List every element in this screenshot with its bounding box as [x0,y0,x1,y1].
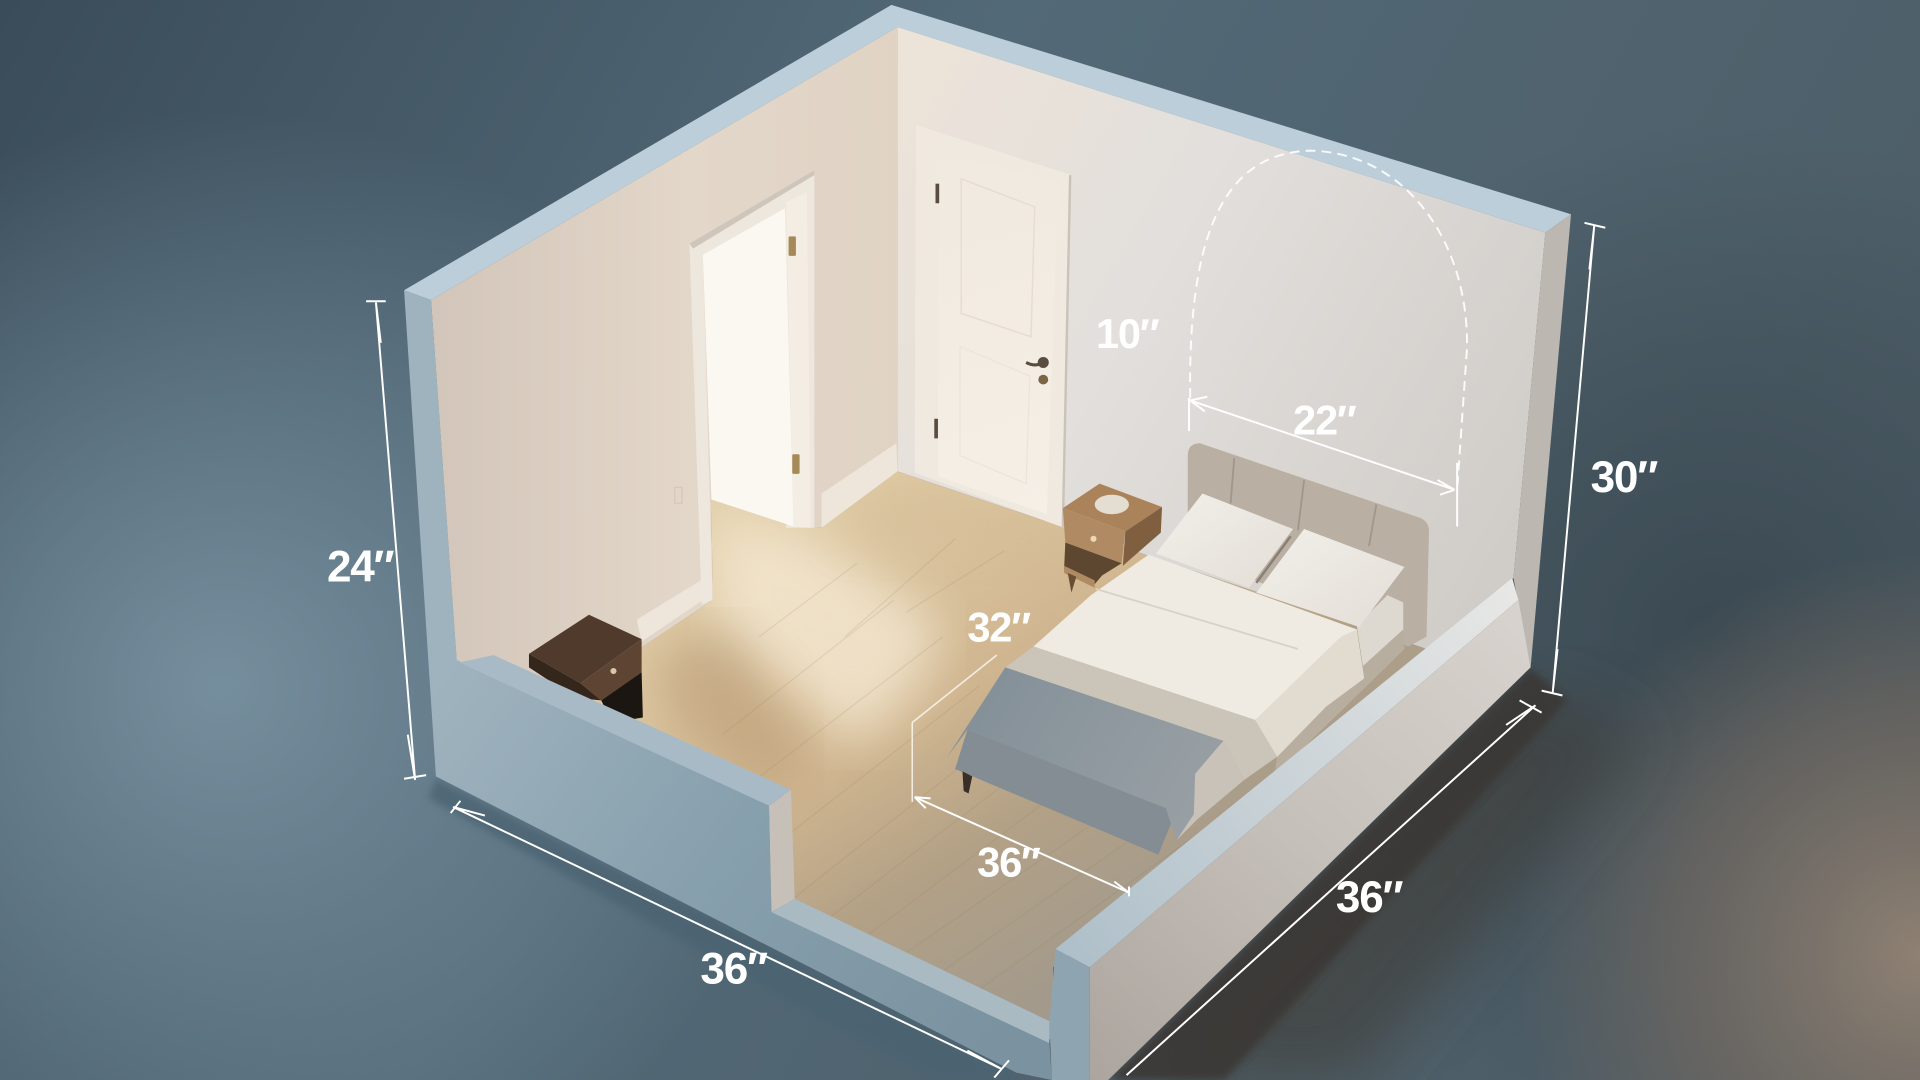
headboard [1188,443,1429,647]
panel: right low wall [1049,578,1531,1080]
bed end frame [955,730,1177,855]
mattress [1357,595,1403,666]
duvet [1033,555,1364,757]
end face [769,790,795,912]
bed [947,443,1429,855]
cap lower [771,899,1049,1043]
label: 32 inch: 32″ [967,604,1031,651]
label: 24 inch: 24″ [327,543,395,592]
frame under duvet [1273,629,1404,784]
nightstand right [1063,484,1162,593]
closed door [915,125,1071,528]
dimension: 36 inch front [451,801,1009,1078]
dimension: 32 inch bed line [912,655,997,802]
panel: front low walls [404,290,1052,1080]
label: 10 inch: 10″ [1096,310,1160,357]
label: 36 inch front: 36″ [700,944,768,993]
doorway with open door [689,170,814,605]
label: 30 inch: 30″ [1591,453,1658,502]
hanging side [1177,741,1244,840]
cap left [459,655,791,806]
dimension: 24 inch left [366,301,426,780]
baseboards [637,443,898,642]
label: 22 inch: 22″ [1293,397,1357,444]
outer faces [404,290,1052,1080]
arch outline dashed [1190,151,1467,490]
label: 36 inch inner: 36″ [977,839,1041,886]
nightstand left [529,615,643,722]
dimension: 22 inch width [1189,397,1457,527]
throw blanket [1005,647,1277,780]
panel: room shell back walls [404,5,1571,716]
wall outlet [675,487,682,503]
dimension: 36 inch right [1127,700,1542,1075]
panel: wood floor [539,471,1427,1041]
grey blanket [947,667,1223,840]
pillows [1156,493,1404,627]
dimension: 30 inch right [1542,223,1605,696]
dimension: 36 inch inner [915,797,1129,896]
label: 36 inch right: 36″ [1336,873,1403,922]
